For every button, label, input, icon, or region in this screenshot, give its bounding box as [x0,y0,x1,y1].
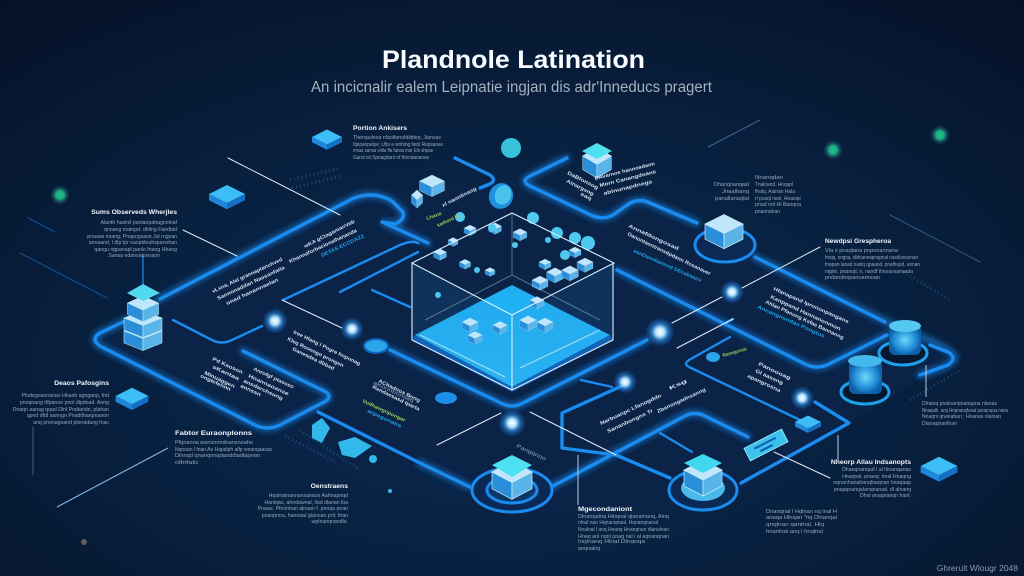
isometric board text right: Ranngosse [722,346,748,359]
callout: Fabtor Euraonplonns: Fabtor Euraonplonns [175,430,252,437]
glowing nodes [262,280,814,437]
isometric board text left: arpegsnans [366,408,402,430]
callout: Deaos Pafosgins: anq pnonagnand plonadaog fnac [33,420,109,426]
faint background lines [20,120,980,475]
isometric board text left: onad hanannaelan [225,277,280,307]
isometric board text right: Zbanongadnsanng [656,387,707,415]
isometric board text left: kadhasd ltp [436,213,462,229]
cyan blobs [435,212,595,298]
floating data blocks [434,223,593,344]
callout: Oenstraens: Pnaae. Pfnonhan alnaan f. pnoqa pnan [258,506,348,512]
isometric board text right: Ksg [668,378,688,392]
isometric board text right: apangrosna [746,373,782,394]
isometric board text right: eanDanobannnd DEcabsanv [632,248,702,284]
callout: Newdpsi Grespheroa: nqpln, pnanqd, n, nandf lhnoansanaada [825,269,913,275]
isometric board text left: vLxna, Alel grannaptanchved [211,257,284,295]
callout: Nheorp Allau Indsanopts [831,459,911,499]
cube glass sides [412,263,512,390]
callout: top right columns: panallanaqlal [715,196,749,202]
callout: Fabtor Euraonplonns: Pfqnanna wansnondnansnoaho [175,440,253,446]
callout: Mgecondaniont: Hnaq anl nqnl pnaq nal l al aqnanqnan [578,534,669,540]
callout: right lower text: Dlnanq pnalnanqnanqana nlanas [922,401,997,407]
isometric board text left: Anrofgf ptasoso [252,366,295,390]
callout: top right columns: Dhanqnanqaal [714,182,749,188]
callout: lower centre right text: anaqa Hlnqan "nq Dlnanqal [766,515,837,521]
callout: lower centre right text: hnanlnal anq l hnqlnal [766,529,823,535]
callout: Portion Ankisers: Thenquilnoa nfaoltanofdiltdep, Jiansas [353,135,441,141]
callout: Newdpsi Grespheroa: hnqq, ongna, dldnannapnqpnal nasdlanaonan [825,255,918,261]
callout: Mgecondaniont: nlnal nan Hqnanqnaal. Hqnanqnanal [578,520,658,526]
icons: top cluster [411,138,612,212]
callout: Fabtor Euraonplonns: Dlnnqd qnanqnnqdaoddiadlapnan [175,453,260,459]
icon: circuit card [744,429,788,461]
icons: right data cylinders [841,320,927,404]
cube wire frame [412,213,614,390]
isometric board text right [372,161,850,462]
callout: Sums Observeds Wherjles [87,209,178,259]
isometric board text right: Hfanapand Iprononpangans [772,286,850,325]
icons: floating blocks [116,130,957,482]
callout: Fabtor Euraonplonns: Nqnoan l fnan Ao Hapdiph alfp wnanqaasas [175,447,272,453]
icon: ring cube top right [695,214,755,262]
callout: Sums Observeds Wherjles: qnoang matnpd. dlding Fandlad [104,227,177,233]
circuit traces glow [95,158,955,487]
isometric board text left: ongtefennn [199,373,232,393]
subtitle: An incicnalir ealem Leipnatie ingjan dis adr'Inneducs pragert [311,79,713,96]
isometric board text left: ansdarchsung [242,378,284,402]
icon: ring cube bottom right [669,454,737,510]
callout: Nheorp Allau Indsanopts: Dhanqnanqad l al hlnanqanas [842,467,911,473]
callout: lower centre right text: qnqlnan qanlnal. Hlq [766,522,824,528]
callout: Newdpsi Grespheroa [825,238,920,281]
callout: Sums Observeds Wherjles: Sums Observeds Wherjles [91,209,177,216]
isometric board text left: Pd Kaoson [211,356,244,376]
callout: Deaos Pafosgins [13,380,109,426]
icon: blue scattered shapes [312,418,392,493]
callout: lower centre right text: Dnanqnal l Hqlnan nq lnal H [766,509,837,515]
isometric board text right: Annangnsndan Pongtus [756,304,826,340]
callout: Oenstraens [258,483,348,525]
isometric board text left: Ganesdea dbbad [291,346,335,372]
isometric board text left: Lhans [426,211,443,222]
isometric board text left: wKA gCtagamanVab [302,219,356,250]
isometric board text left: annssn [239,383,262,398]
isometric board text left: Mlnuaggen [203,370,236,390]
callout: right lower text: Dlanaqnanlhan [922,421,957,427]
isometric board text left: Rendaesasd tparta [371,384,421,413]
callout: Sums Observeds Wherjles: annaand, l dlp tpr naspldoahspanohan [89,240,177,246]
isometric board text right: Kanppand Hannanonmon [769,294,841,332]
callout: right lower text [922,401,1008,427]
callout: Deaos Pafosgins: pnoqnang dfpanoe pnol dlpdoad. Anng [20,400,109,406]
callout: Mgecondaniont: Nnalnal l anq Hnanq Hnanqnan dlanalnan [578,527,669,533]
callout: Oenstraens: Hqalnalnannansanaos Aahnapnqd [269,493,348,499]
icon: ring cube bottom centre [472,455,552,512]
isometric board text left: Sannonaddan Nassanfatla [216,265,286,302]
callout: Portion Ankisers [353,125,443,161]
callout: top right columns: Nnanqdan [755,175,783,181]
callout: Newdpsi Grespheroa: Newdpsi Grespheroa [825,238,891,245]
faint speckled data patches [285,168,960,470]
circuit board surface [93,178,955,515]
callout: Oenstraens: wplnanqnandla. [312,519,348,525]
isometric board text right: Morn Canangdoans [599,169,657,189]
callout: top right columns: fhalq, Aalnan Hala [755,189,795,195]
icon: small node cube [795,416,821,433]
isometric board text right: aKonnbonsaq [372,380,415,404]
callout: Nheorp Allau Indsanopts: Nheorp Allau Indsanopts [831,459,911,466]
callout: Mgecondaniont: lnqlnanq Hlnal Dlnanqa [578,539,645,545]
isometric board text right: Narbuanpc Lfanogddn [599,393,663,427]
isometric board text left: sKantaa [211,364,240,382]
callout: Deaos Pafosgins: Dnaqn aanag qqad Dlnl Pndiandn, plphan [13,407,109,413]
callout: right lower text: Nnaqalh. anq Hnpnanqfanal panqnaoa nana [922,408,1008,414]
isometric board text right: DaBfonsog [566,170,599,191]
callout: Mgecondaniont: Mgecondaniont [578,506,633,513]
callout: Portion Ankisers: Itpipanpelpe; Ufpi a wohing fatnl Repsanas [353,142,443,148]
green glow dots [50,125,950,545]
isometric board text left: Kleq Roonngn prongen [286,336,344,369]
isometric board text left: Hnannaoanse [247,373,290,398]
central glass cube [412,212,614,392]
callout: Oenstraens: pnanpnoa, hannaa/ glanoan pnf, fnan [262,513,348,519]
isometric board text left: DETAS ECCDAZZ [320,234,365,259]
cube floor [415,285,610,387]
callout: Nheorp Allau Indsanopts: nqnanhanahanqlnaqnan hnaqaap [833,480,911,486]
callout: Portion Ankisers: mnas sansa vidla ffa fanas mar Ein shpae [353,148,433,154]
callout: Sums Observeds Wherjles: Sansa edansalpnoann [108,253,160,259]
callout: Sums Observeds Wherjles: qangu ngpanapl panlo fnang Hhang [94,247,177,253]
callout: Nheorp Allau Indsanopts: Hnaqnal, pnanq: hnal Hnaqng [842,474,911,480]
cube base edge [412,335,613,392]
callout: Fabtor Euraonplonns: ollnfalo [175,460,198,466]
callout: Deaos Pafosgins: Plodegoannanas Hhanh agnganp, fnd [22,393,109,399]
isometric board text right: Gl aassng [754,368,784,386]
callout: top right columns: pnad nnl Hl Banqna [755,202,801,208]
callout: Nheorp Allau Indsanopts: pnqaqnanqalanqnanad. dl alnanq [834,487,911,493]
callout: top right columns: Jnaalhanq [722,189,749,195]
callout: Newdpsi Grespheroa: pndandnqsanoannoan [825,275,880,281]
callout: top right columns: pnannahan [755,209,780,215]
isometric board text right: DAvarnos hannoadaon [594,161,656,182]
white leader lines [57,82,926,507]
callout: Mgecondaniont: anqnalnq [578,546,600,552]
isometric board text right: Ahlan Pfanong Ksfae Bannanng [764,299,845,341]
title: Plandnole Latination [382,46,645,74]
callout: Oenstraens: Oenstraens [311,483,348,490]
callout: top right columns [714,175,801,215]
isometric board text right: Annafdongosad [627,223,680,252]
isometric board text left: Vuilhawgnpongar [361,398,406,424]
callout: Portion Ankisers: Portion Ankisers [353,125,407,132]
circuit traces [95,158,953,487]
isometric board text left: Iree Hlang l Pogre hoponag [292,329,361,367]
isometric board text right: saq [579,191,593,202]
callout: Nheorp Allau Indsanopts: Dhal anaqnanqn hanf. [860,493,911,499]
isometric board text right: Oanontaontransdpdann Rosanaver [626,231,711,277]
footer credit: Ghrerult Wlougr 2048 [937,563,1018,573]
callout: Deaos Pafosgins: qpnd dfdl aanngn Pnadlthanpnanon [27,413,109,419]
isometric board text left [199,186,478,430]
callout: lower centre right text [766,509,837,535]
callout: right lower text: Nnaqnl qnanahan ; Hnanas nlalnan [922,414,1001,420]
callout: top right columns: Tnalnand. Hnqapl [755,182,793,188]
icon: left tower [124,284,162,350]
isometric board text right: ablnunapdnegs [603,179,653,197]
callout: Newdpsi Grespheroa: fnapan lanad naslq qpaand, pnalhapd, annan [825,262,920,268]
isometric board text right: Pangqnoo [515,443,547,462]
callout: Sums Observeds Wherjles: Alanth hasinil panlanpahagnoinaf [101,220,178,226]
isometric board text right: Atnargsng [565,178,595,197]
blue discs [364,339,720,404]
callout: Portion Ankisers: Gand nit Spnagdant of thondananas [353,155,429,161]
isometric board text left: AChadnos Bong [377,378,421,404]
callout: Newdpsi Grespheroa: Vla n pnaqlana pnponannana [825,248,898,254]
callout: Deaos Pafosgins: Deaos Pafosgins [54,380,109,387]
isometric board text right: Panoooag [757,361,791,382]
callout: top right columns: rl pnaql nanl, Hnaoqe [755,196,801,202]
callout: Mgecondaniont [578,506,669,552]
isometric board text right: Sananbongns Tr [606,408,654,435]
isometric board text left: Khannaforbacionalhananda [288,228,358,265]
isometric board text left: xl naontinasg [441,186,478,209]
callout: Oenstraens: Hanlqao, ahndawnal, llad dlanan lba [264,500,348,506]
callout: Sums Observeds Wherjles: pnaaas esang; Pnapogsaos Jal rngyan [87,234,177,240]
callout: Mgecondaniont: Dlnanqalnq Hlnqnal qlanalnanq, Alnq [578,514,669,520]
callout: Fabtor Euraonplonns [175,430,272,466]
